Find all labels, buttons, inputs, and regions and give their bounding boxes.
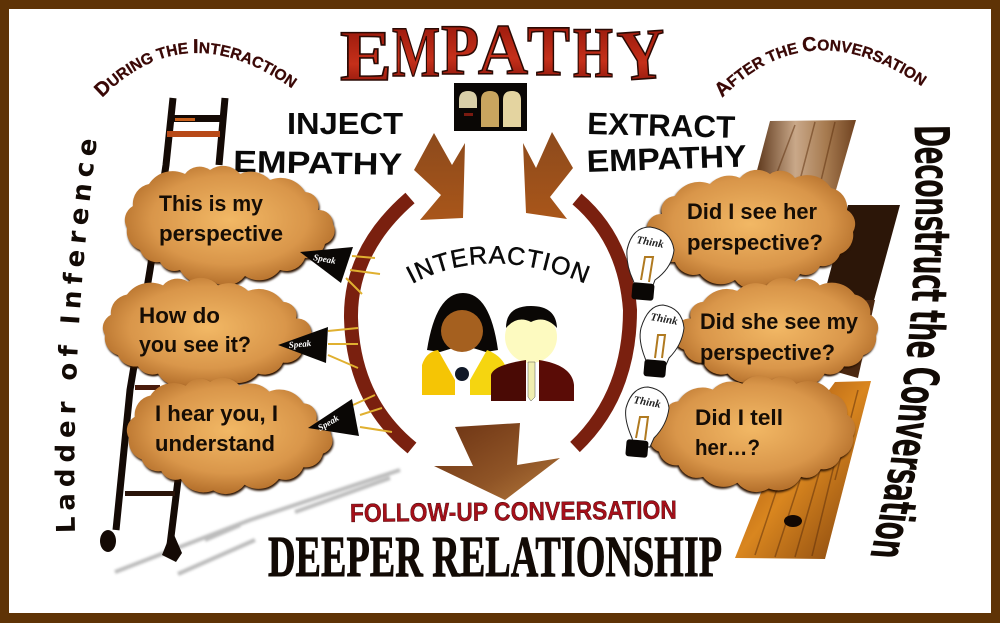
icon: three arched windows [454,83,527,131]
ladder [100,98,225,562]
icon: megaphone 1 [300,247,380,294]
arrow: inject into interaction [414,133,465,220]
speech cloud: did I tell her: her…? [695,435,760,460]
heading: deeper relationship: DEEPER RELATIONSHIP [268,524,722,589]
title: H [573,13,613,93]
icon: lightbulb 3: Think [632,394,662,411]
wood knot [784,515,802,527]
title: M [392,12,440,92]
speech cloud: I hear you [127,378,333,494]
icon: megaphone 1: Speak [313,252,337,266]
icon: lightbulb 3 [625,387,669,458]
icon: lightbulb 2 [640,305,684,378]
speech cloud: did she see my perspective: Did she see my [700,309,859,334]
title: T [527,11,570,91]
title: P [441,10,479,90]
plank: top [755,120,856,190]
icon: man [491,306,574,401]
speech cloud: did I see her perspective: perspective? [687,230,823,255]
title: A [478,10,528,90]
title [340,10,668,96]
speech cloud: how do you see it: How do [139,303,220,328]
speech cloud: did I tell her [649,376,855,492]
arc: right side of interaction circle [575,199,630,447]
plank: dark middle [820,205,900,315]
title: Y [615,13,668,96]
speech cloud: did I see her perspective: Did I see her [687,199,817,224]
heading: inject empathy: EMPATHY [233,144,403,182]
speech cloud: this is my perspective: perspective [159,221,283,246]
curved label: after the conversation: AFTER THE CONVERSATION [716,36,928,98]
heading: follow-up conversation: FOLLOW-UP CONVERSATION [350,495,677,528]
wood grain [755,122,858,557]
curved label: during the interaction: DURING THE INTERACTION [93,39,298,98]
arrow: down to follow-up [434,423,560,500]
plank: orange bottom [735,381,871,559]
speech cloud: did she see my perspective [675,278,878,388]
icon: lightbulb 1: Think [635,234,665,251]
speech cloud: this is my perspective: This is my [159,191,264,216]
icon: lightbulb 2: Think [649,311,679,328]
arc: left side of interaction circle [351,198,412,448]
heading: inject empathy: INJECT [287,106,403,141]
speech cloud: I hear you: I hear you, I [155,401,278,426]
arrow: extract from interaction [523,132,573,219]
heading: extract empathy: EMPATHY [586,138,747,179]
floor shadow of ladder [115,470,400,574]
plank: dark lower [830,300,875,378]
speech cloud: how do you see it [103,278,313,388]
icon: megaphone 3 [308,395,392,436]
speech cloud: I hear you: understand [155,431,275,456]
side label: deconstruct the conversation: Deconstruct the Conversation [870,127,950,557]
speech cloud: did I see her perspective [645,170,855,290]
speech cloud: did I tell her: Did I tell [695,405,783,430]
side label: ladder of inference: Ladder of Inference [54,140,96,531]
heading: inject empathy [233,106,403,182]
icon: megaphone 2 [278,327,358,368]
heading: extract empathy: EXTRACT [587,106,736,145]
title: E [340,16,392,96]
speech cloud: how do you see it: you see it? [139,332,251,357]
heading: extract empathy [586,106,747,179]
curved label: interaction: INTERACTION [406,246,590,284]
icon: woman [422,293,505,395]
icon: lightbulb 1 [627,227,674,301]
icon: megaphone 2: Speak [288,338,312,350]
speech cloud: did she see my perspective: perspective? [700,340,835,365]
speech cloud: this is my perspective [125,166,335,286]
icon: megaphone 3: Speak [316,413,341,433]
wooden planks [735,120,900,559]
